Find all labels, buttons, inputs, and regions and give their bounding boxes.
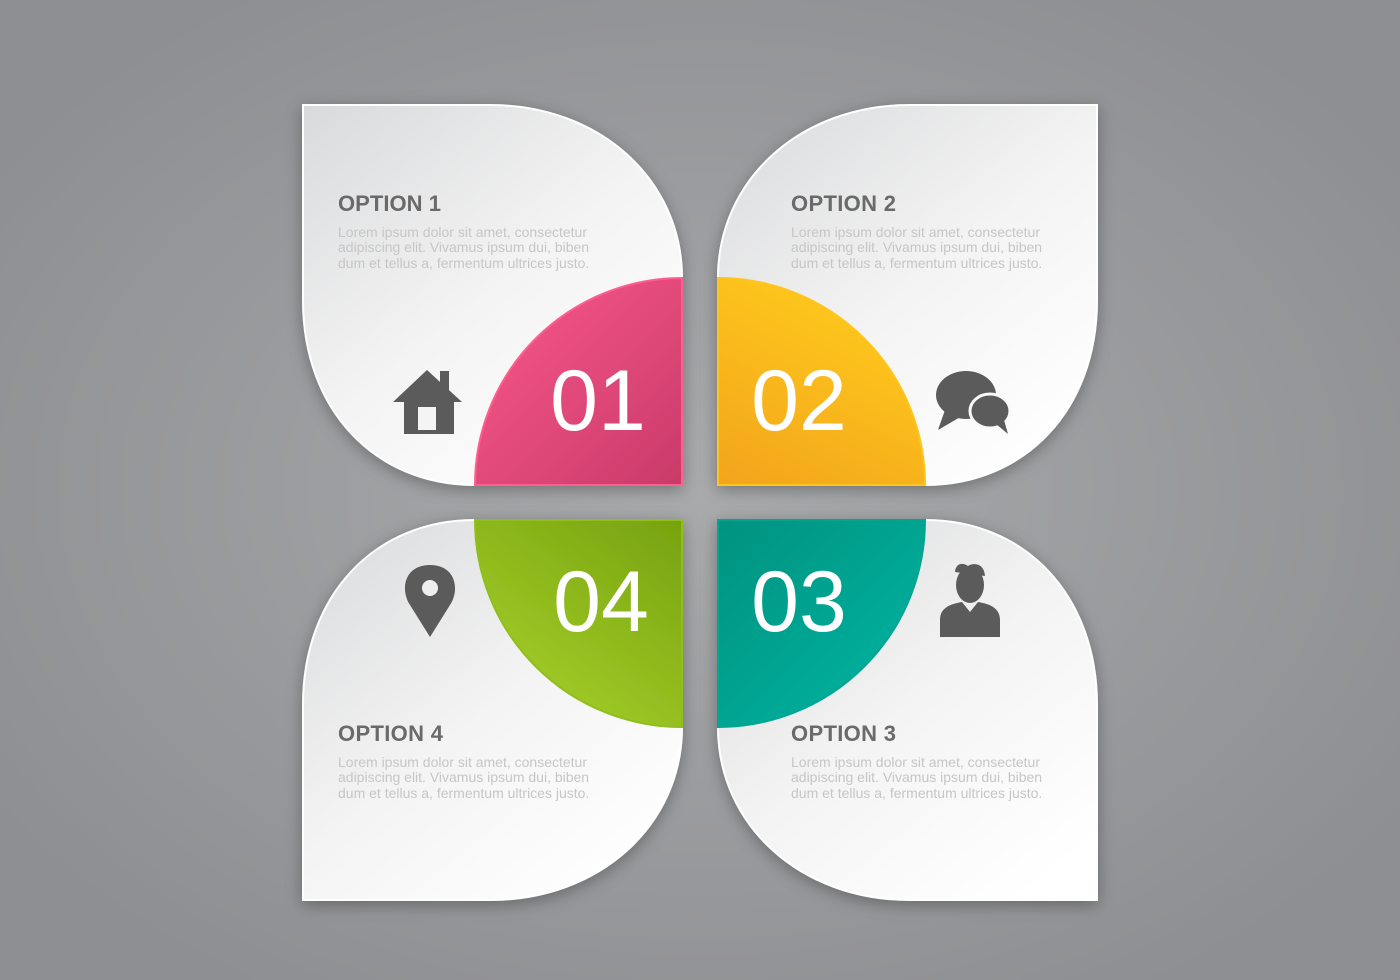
panel: option 2 petal	[718, 105, 1097, 485]
icon: chat bubbles	[936, 371, 1010, 434]
text block: option 2: OPTION 2	[791, 191, 896, 216]
number segment 01	[475, 278, 682, 485]
panel: option 1 petal	[303, 105, 682, 485]
text block: option 3: dum et tellus a, fermentum ultrices justo.	[791, 785, 1042, 801]
icon: map pin	[405, 565, 455, 637]
number 02: 02	[751, 353, 847, 449]
text block: option 3: OPTION 3	[791, 721, 896, 746]
text block: option 1: adipiscing elit. Vivamus ipsum dui, biben	[338, 239, 589, 255]
number segment 04	[475, 520, 682, 727]
text block: option 4: dum et tellus a, fermentum ultrices justo.	[338, 785, 589, 801]
number 03: 03	[751, 554, 847, 650]
text block: option 3	[791, 721, 1042, 801]
icon: house	[393, 370, 462, 434]
number segment 03	[718, 520, 925, 727]
panel: option 3 petal	[718, 520, 1097, 900]
text block: option 3: adipiscing elit. Vivamus ipsum dui, biben	[791, 769, 1042, 785]
text block: option 1: OPTION 1	[338, 191, 441, 216]
text block: option 4: OPTION 4	[338, 721, 444, 746]
text block: option 1: dum et tellus a, fermentum ultrices justo.	[338, 255, 589, 271]
text block: option 2: adipiscing elit. Vivamus ipsum dui, biben	[791, 239, 1042, 255]
number 04: 04	[553, 554, 649, 650]
text block: option 2: Lorem ipsum dolor sit amet, consectetur	[791, 224, 1040, 240]
number 01: 01	[550, 353, 646, 449]
text block: option 2: dum et tellus a, fermentum ultrices justo.	[791, 255, 1042, 271]
text block: option 2	[791, 191, 1042, 271]
panel: option 4 petal	[303, 520, 682, 900]
icon: person	[940, 564, 1000, 637]
text block: option 4: adipiscing elit. Vivamus ipsum dui, biben	[338, 769, 589, 785]
number segment 02	[718, 278, 925, 485]
text block: option 4: Lorem ipsum dolor sit amet, consectetur	[338, 754, 587, 770]
text block: option 1	[338, 191, 589, 271]
text block: option 4	[338, 721, 589, 801]
text block: option 3: Lorem ipsum dolor sit amet, consectetur	[791, 754, 1040, 770]
text block: option 1: Lorem ipsum dolor sit amet, consectetur	[338, 224, 587, 240]
